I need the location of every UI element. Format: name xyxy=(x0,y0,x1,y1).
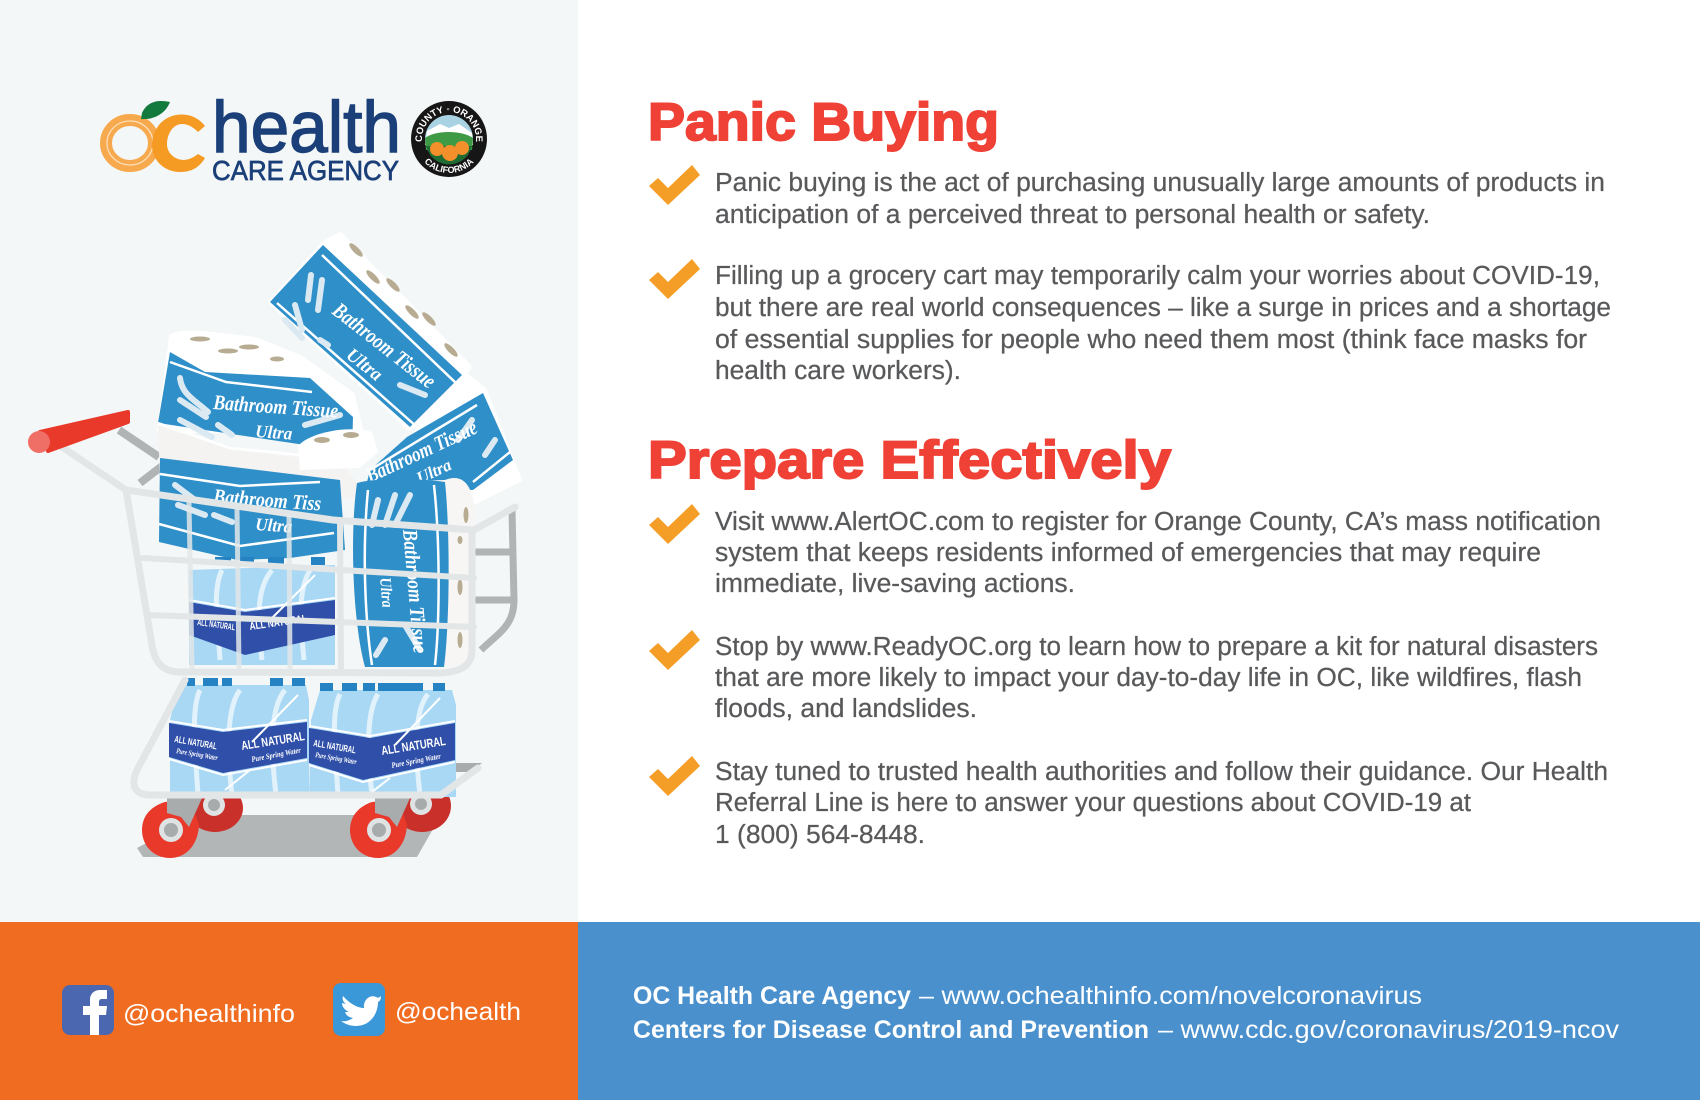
rear wheels xyxy=(187,780,451,832)
toilet paper pack lower left xyxy=(159,458,345,560)
cart front wire basket xyxy=(56,443,515,795)
icon: twitter xyxy=(333,983,385,1036)
resource line 1: – www.ochealthinfo.com/novelcoronavirus xyxy=(919,982,1422,1010)
text xyxy=(715,508,1601,598)
text xyxy=(715,169,1605,229)
text: but there are real world consequences – like a surge in prices and a shortage xyxy=(715,294,1611,322)
wordmark: health: health xyxy=(212,88,401,168)
icon: check xyxy=(649,259,700,299)
footer: social panel xyxy=(0,922,578,1100)
cart back frame xyxy=(119,430,514,650)
water pack bottom left xyxy=(169,678,309,797)
illustration: shopping cart xyxy=(28,236,520,858)
text: Stop by www.ReadyOC.org to learn how to prepare a kit for natural disasters xyxy=(715,633,1598,661)
water pack bottom left: ALL NATURAL xyxy=(240,729,306,753)
water pack upper: ALL NATURAL xyxy=(197,617,236,632)
text: Visit www.AlertOC.com to register for Orange County, CA’s mass notification xyxy=(715,508,1601,536)
list item: check 4 xyxy=(649,630,1598,723)
list item: check 1 xyxy=(649,165,1605,229)
resource line 1 xyxy=(633,982,1422,1010)
water pack bottom right: Pure Spring Water xyxy=(315,750,358,766)
toilet paper pack top: Ultra xyxy=(342,344,387,386)
list item: check 5 xyxy=(649,756,1608,849)
toilet paper pack upper left: Bathroom Tissue xyxy=(212,390,339,423)
text: Referral Line is here to answer your questions about COVID-19 at xyxy=(715,789,1471,817)
text: system that keeps residents informed of emergencies that may require xyxy=(715,539,1541,567)
text xyxy=(715,262,1611,385)
cart shadow xyxy=(137,815,441,857)
text: of essential supplies for people who need them most (think face masks for xyxy=(715,326,1588,354)
icon: county seal xyxy=(411,101,487,177)
toilet paper band middle xyxy=(158,425,372,500)
water pack bottom right: Pure Spring Water xyxy=(391,751,442,770)
text: Stay tuned to trusted health authorities and follow their guidance. Our Health xyxy=(715,758,1608,786)
facebook handle: @ochealthinfo xyxy=(123,1000,295,1028)
list item: check 3 xyxy=(649,504,1601,598)
list item: check 2 xyxy=(649,259,1611,385)
small roll between packs xyxy=(298,429,378,470)
resource line 2: Centers for Disease Control and Prevention xyxy=(633,1016,1149,1044)
water pack bottom left: Pure Spring Water xyxy=(251,745,302,764)
toilet paper pack right: Ultra xyxy=(414,455,455,488)
water pack upper xyxy=(189,557,335,665)
resource line 2 xyxy=(633,1016,1620,1044)
icon: check xyxy=(649,756,700,796)
heading: Panic Buying: Panic Buying xyxy=(648,93,999,152)
icon: orange O xyxy=(106,101,170,166)
icon: county seal: COUNTY ◦ ORANGE xyxy=(415,106,483,142)
water pack bottom right xyxy=(309,683,456,797)
resource line 2: – www.cdc.gov/coronavirus/2019-ncov xyxy=(1158,1016,1620,1044)
toilet paper pack right: Bathroom Tissue xyxy=(361,415,481,488)
toilet paper pack front: Ultra xyxy=(376,577,396,608)
icon: check xyxy=(649,504,700,544)
water pack bottom left: ALL NATURAL xyxy=(173,734,218,752)
toilet paper pack lower left: Ultra xyxy=(255,514,293,537)
heading: Prepare Effectively: Prepare Effectively xyxy=(648,431,1172,490)
logo: OC Health Care Agency xyxy=(100,88,487,186)
wordmark: care agency: CARE AGENCY xyxy=(212,155,399,186)
toilet paper pack right xyxy=(361,375,520,505)
icon: facebook xyxy=(62,985,114,1035)
icon: orange C xyxy=(152,114,205,172)
water pack bottom right: ALL NATURAL xyxy=(312,738,357,756)
text: floods, and landslides. xyxy=(715,695,977,723)
toilet paper pack upper left xyxy=(158,334,360,458)
icon: check xyxy=(649,630,700,670)
footer: resources panel xyxy=(578,922,1700,1100)
water pack bottom right: ALL NATURAL xyxy=(380,734,447,758)
text: anticipation of a perceived threat to personal health or safety. xyxy=(715,201,1430,229)
text xyxy=(715,758,1608,849)
cart handle xyxy=(28,412,128,453)
icon: check xyxy=(649,165,700,205)
toilet paper pack upper left: Ultra xyxy=(255,421,293,444)
text xyxy=(715,633,1598,723)
text: Filling up a grocery cart may temporarily calm your worries about COVID-19, xyxy=(715,262,1600,290)
water pack upper: ALL NATURAL xyxy=(249,613,308,633)
toilet paper pack front: Bathroom Tissue xyxy=(398,528,433,654)
resource line 1: OC Health Care Agency xyxy=(633,982,911,1010)
front wheels xyxy=(142,798,410,858)
toilet paper pack top xyxy=(270,236,468,427)
twitter handle: @ochealth xyxy=(395,998,521,1026)
water pack bottom left: Pure Spring Water xyxy=(176,746,219,762)
text: Panic buying is the act of purchasing unusually large amounts of products in xyxy=(715,169,1605,197)
panel: left background xyxy=(0,0,578,923)
toilet paper pack front xyxy=(353,478,474,667)
toilet paper pack top: Bathroom Tissue xyxy=(327,297,441,393)
text: health care workers). xyxy=(715,357,961,385)
icon: county seal: CALIFORNIA xyxy=(425,158,474,173)
toilet paper pack lower left: Bathroom Tiss xyxy=(212,484,322,516)
text: 1 (800) 564-8448. xyxy=(715,821,925,849)
text: that are more likely to impact your day-to-day life in OC, like wildfires, flash xyxy=(715,664,1582,692)
text: immediate, live-saving actions. xyxy=(715,570,1075,598)
